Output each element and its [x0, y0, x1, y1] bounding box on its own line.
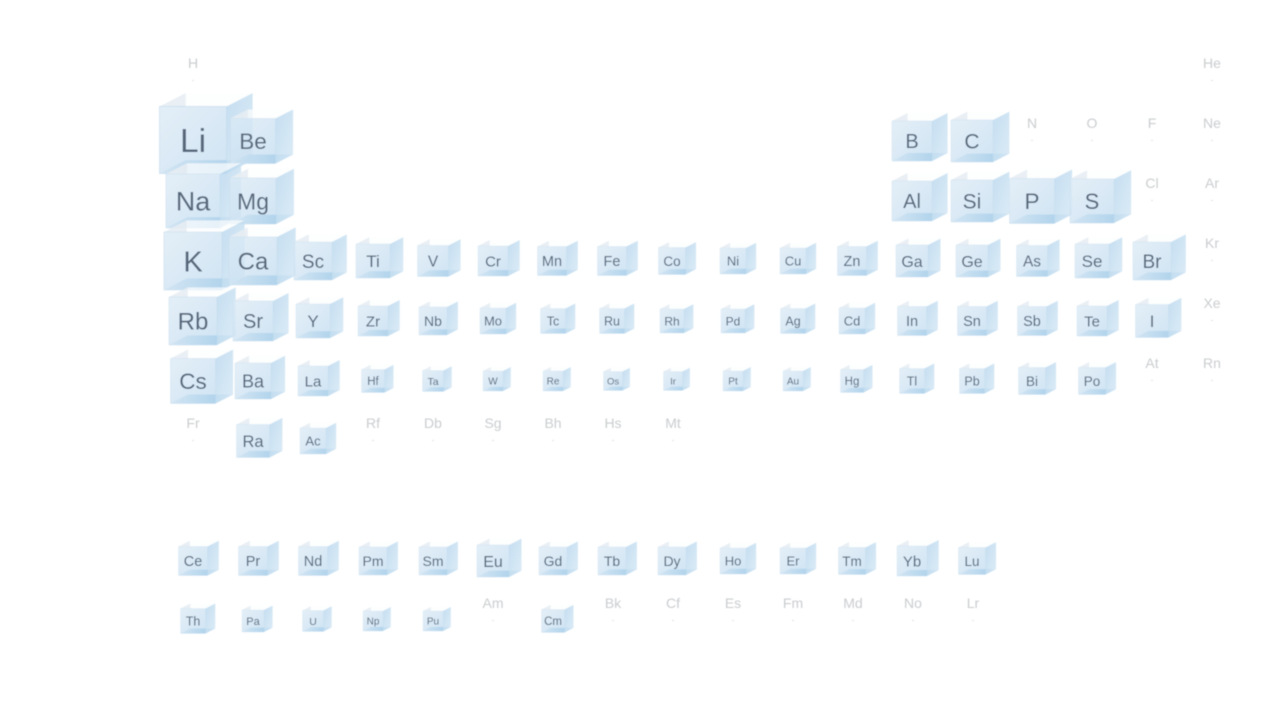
uncubed elements, top rows: Ar: [1205, 175, 1219, 191]
cube: Ba: [235, 356, 285, 399]
period 6 cubes: [170, 350, 1116, 404]
cube: B: B: [905, 131, 919, 153]
cube: Al: [892, 173, 948, 221]
cube: In: [898, 301, 938, 336]
cube: Be: [230, 110, 293, 164]
cube: P: [1010, 170, 1072, 224]
period 2 cubes: [160, 93, 1009, 174]
cube: Ru: Ru: [604, 314, 620, 328]
cube: Np: [363, 607, 391, 631]
cube: Tl: [900, 364, 934, 394]
cube: Bi: [1018, 362, 1056, 394]
period 4 cubes: [164, 220, 1186, 290]
cube: Cu: [780, 243, 816, 274]
cube: Cd: Cd: [844, 314, 860, 329]
cube: Co: Co: [663, 254, 681, 269]
cube: Cu: Cu: [785, 254, 801, 269]
uncubed elements, top rows: Xe: [1203, 295, 1221, 311]
cube: Pd: [721, 304, 754, 333]
uncubed elements, actinides: Es: [725, 595, 741, 611]
cube: Si: Si: [963, 191, 981, 214]
cube: Ti: Ti: [366, 252, 380, 271]
cube: W: W: [488, 377, 498, 388]
cube: Po: Po: [1084, 374, 1100, 389]
cube: Se: [1075, 237, 1122, 278]
uncubed elements, actinides: [482, 595, 980, 621]
cube: Ba: Ba: [242, 371, 265, 391]
cube: Ac: Ac: [305, 434, 321, 449]
cube: I: I: [1150, 313, 1154, 331]
cube: V: V: [428, 254, 439, 271]
cube: Sm: [419, 541, 458, 575]
cube: Gd: [539, 541, 578, 575]
cube: Mg: [230, 169, 294, 224]
cube: Ra: Ra: [242, 433, 264, 451]
cube: Pm: [359, 541, 398, 575]
cube: Re: [543, 367, 571, 391]
uncubed elements, actinides: No: [904, 595, 922, 611]
cube: As: As: [1023, 254, 1041, 271]
uncubed elements, actinides: Am: [482, 595, 504, 611]
cube: Po: [1078, 362, 1116, 394]
cube: Zn: Zn: [844, 254, 860, 270]
uncubed elements, top rows: At: [1145, 355, 1159, 371]
period 3 cubes: [166, 163, 1131, 228]
cube: Sc: [294, 234, 347, 280]
cube: Zr: [358, 300, 400, 336]
cube: Rb: Rb: [178, 309, 208, 336]
uncubed elements, actinides: Fm: [783, 595, 803, 611]
cube: Li: Li: [180, 123, 206, 160]
period 5 cubes: [169, 287, 1181, 345]
cube: U: [302, 606, 332, 632]
cube: Dy: [658, 541, 697, 575]
cube: Ti: [356, 237, 403, 278]
cube: Tb: [598, 541, 637, 575]
cube: Pa: Pa: [246, 616, 261, 628]
cube: Pd: Pd: [726, 314, 740, 328]
uncubed elements, top rows: [188, 55, 1221, 381]
cube: Cd: [839, 303, 875, 334]
cube: Sr: Sr: [243, 311, 263, 333]
cube: Er: Er: [787, 554, 800, 569]
uncubed elements, top rows: F: [1148, 115, 1156, 131]
cube: Ru: [600, 304, 634, 334]
cube: U: U: [309, 616, 317, 628]
uncubed elements, top rows: Rn: [1203, 355, 1221, 371]
uncubed elements, top rows: Ne: [1203, 115, 1221, 131]
cube: Ho: Ho: [725, 554, 741, 569]
uncubed elements, period 7: Sg: [484, 415, 502, 431]
cube: Ga: Ga: [901, 254, 923, 271]
cube: Hg: Hg: [845, 376, 859, 388]
uncubed elements, top rows: O: [1087, 115, 1098, 131]
uncubed elements, period 7: Mt: [665, 415, 681, 431]
cube: Cm: Cm: [544, 616, 562, 628]
cube: Te: Te: [1084, 313, 1100, 330]
uncubed elements, top rows: Cl: [1145, 175, 1159, 191]
cube: Eu: [477, 539, 521, 577]
cube: Fe: Fe: [604, 254, 620, 270]
cube: Cm: [542, 605, 573, 632]
cube: Au: [783, 367, 811, 391]
cube: Pr: Pr: [246, 554, 260, 570]
cube: Th: [180, 604, 215, 634]
cube: Al: Al: [903, 191, 921, 213]
cube: Pb: Pb: [964, 374, 980, 388]
cube: Tm: Tm: [842, 554, 862, 569]
cube: S: S: [1085, 189, 1099, 214]
cube: Bi: Bi: [1026, 374, 1038, 389]
cube: Pm: Pm: [362, 553, 384, 569]
cube: Na: [166, 163, 241, 228]
cube: C: [951, 112, 1009, 162]
cube: Tb: Tb: [604, 553, 620, 569]
cube: Cr: [478, 240, 520, 276]
cube: Li: [160, 93, 253, 174]
cube: Fe: [598, 241, 638, 276]
cube: Dy: Dy: [663, 553, 681, 569]
cube: Ta: [422, 366, 452, 392]
cube: Yb: Yb: [903, 553, 921, 570]
cube: Mn: Mn: [542, 254, 562, 270]
cube: Mn: [538, 241, 578, 276]
cube: Pu: [423, 607, 451, 631]
uncubed elements, period 7: Rf: [366, 415, 380, 431]
cube: La: La: [305, 373, 322, 390]
cube: Nd: Nd: [304, 554, 322, 570]
uncubed elements, top rows: N: [1027, 115, 1037, 131]
cube: Rh: Rh: [664, 314, 680, 328]
cube: Si: [951, 172, 1009, 222]
cube: Gd: Gd: [544, 553, 562, 569]
cube: Ta: Ta: [427, 376, 439, 388]
cube: W: [483, 367, 511, 391]
cube: As: [1016, 239, 1060, 276]
cube: Ca: Ca: [238, 249, 269, 276]
cube: Na: Na: [176, 187, 211, 217]
cube: Sc: Sc: [302, 252, 324, 273]
cube: Co: [658, 242, 696, 274]
cube: V: [418, 239, 461, 276]
cube: Os: Os: [607, 376, 619, 387]
cube: Sm: Sm: [422, 553, 444, 569]
cube: Ge: Ge: [961, 254, 983, 271]
cube: Tl: Tl: [907, 374, 917, 388]
uncubed elements, period 7: [186, 415, 681, 441]
cube: Ir: Ir: [670, 376, 676, 387]
cube: La: [298, 360, 340, 396]
cube: Y: [296, 297, 343, 338]
cube: S: [1070, 170, 1131, 223]
uncubed elements, period 7: Bh: [544, 415, 562, 431]
uncubed elements, period 7: Db: [424, 415, 442, 431]
cube: Sb: [1018, 301, 1058, 336]
cube: Lu: [958, 542, 996, 574]
cube: Re: Re: [547, 377, 560, 388]
cube: Mo: [480, 303, 516, 334]
uncubed elements, top rows: H: [188, 55, 198, 71]
cube: Ce: [178, 541, 219, 576]
lanthanide cubes: [178, 539, 996, 577]
uncubed elements, actinides: Md: [843, 595, 863, 611]
actinide cubes: [180, 604, 573, 634]
cube: Th: Th: [186, 614, 200, 628]
uncubed elements, actinides: Bk: [605, 595, 622, 611]
cube: Nb: Nb: [424, 313, 442, 329]
cube: Cr: Cr: [485, 253, 501, 270]
cube: B: [892, 113, 948, 161]
uncubed elements, top rows: He: [1203, 55, 1221, 71]
cube: Eu: Eu: [483, 554, 503, 571]
cube: Se: Se: [1082, 252, 1102, 271]
cube: Cs: Cs: [179, 369, 207, 394]
cube: I: [1136, 298, 1181, 338]
cube: Ag: Ag: [785, 314, 801, 328]
cube: Ni: Ni: [727, 254, 739, 269]
cube: Er: [780, 543, 816, 574]
cube: Ga: [896, 239, 940, 277]
cube: Pa: [242, 606, 273, 632]
cube: Pt: [723, 367, 751, 391]
cube: Ge: [956, 239, 1000, 277]
uncubed elements, period 7: Fr: [186, 415, 200, 431]
cube: C: C: [964, 131, 980, 154]
cube: Hg: [840, 365, 872, 392]
cube: Yb: [897, 540, 939, 576]
cube: Lu: Lu: [964, 554, 980, 569]
cube: Rb: [169, 287, 236, 345]
cube: Hf: [362, 365, 393, 392]
cube: Sn: [958, 301, 998, 336]
cube: K: K: [183, 246, 203, 278]
cube: Tc: Tc: [547, 314, 559, 328]
uncubed elements, period 7: Hs: [604, 415, 622, 431]
cube: Te: [1077, 300, 1119, 336]
cube: Be: Be: [239, 129, 267, 154]
cube: Nb: [419, 301, 458, 335]
cube: Np: Np: [367, 617, 380, 628]
cube: Ir: [664, 368, 690, 390]
cube: In: In: [906, 314, 918, 330]
cube: Hf: Hf: [367, 376, 380, 388]
cube: Pu: Pu: [427, 617, 439, 628]
cube: Br: Br: [1143, 252, 1162, 273]
cube: Tc: [540, 304, 575, 334]
cube: Tm: [838, 542, 876, 574]
cube: Pt: Pt: [728, 377, 738, 388]
cube: Ho: [720, 543, 756, 574]
cube: Br: [1133, 234, 1186, 280]
cube: Ni: [720, 243, 756, 274]
cube: Zr: Zr: [366, 313, 380, 330]
cube: Zn: [838, 241, 878, 276]
cube: Os: [604, 368, 630, 390]
cube: K: [164, 220, 245, 290]
uncubed elements, actinides: Cf: [666, 595, 680, 611]
uncubed elements, actinides: Lr: [967, 595, 980, 611]
cube: Ca: [229, 227, 296, 285]
cube: Sn: Sn: [963, 314, 981, 330]
cube: Rh: [660, 304, 693, 333]
cube: Mo: Mo: [484, 314, 502, 329]
cube: Au: Au: [787, 377, 799, 388]
cube: Ce: Ce: [184, 554, 202, 570]
cube: Sr: [233, 293, 289, 341]
cube: Pr: [238, 541, 279, 576]
cube: Ag: [780, 304, 815, 334]
cube: Pb: [960, 364, 994, 394]
period 7 cubes: [236, 418, 336, 458]
uncubed elements, top rows: Kr: [1205, 235, 1219, 251]
cube: Mg: Mg: [237, 188, 269, 214]
cube: Cs: [170, 350, 233, 404]
cube: Sb: Sb: [1023, 314, 1041, 330]
cube: P: P: [1024, 189, 1040, 214]
cube: Y: Y: [307, 312, 319, 331]
cube: Nd: [298, 541, 339, 576]
